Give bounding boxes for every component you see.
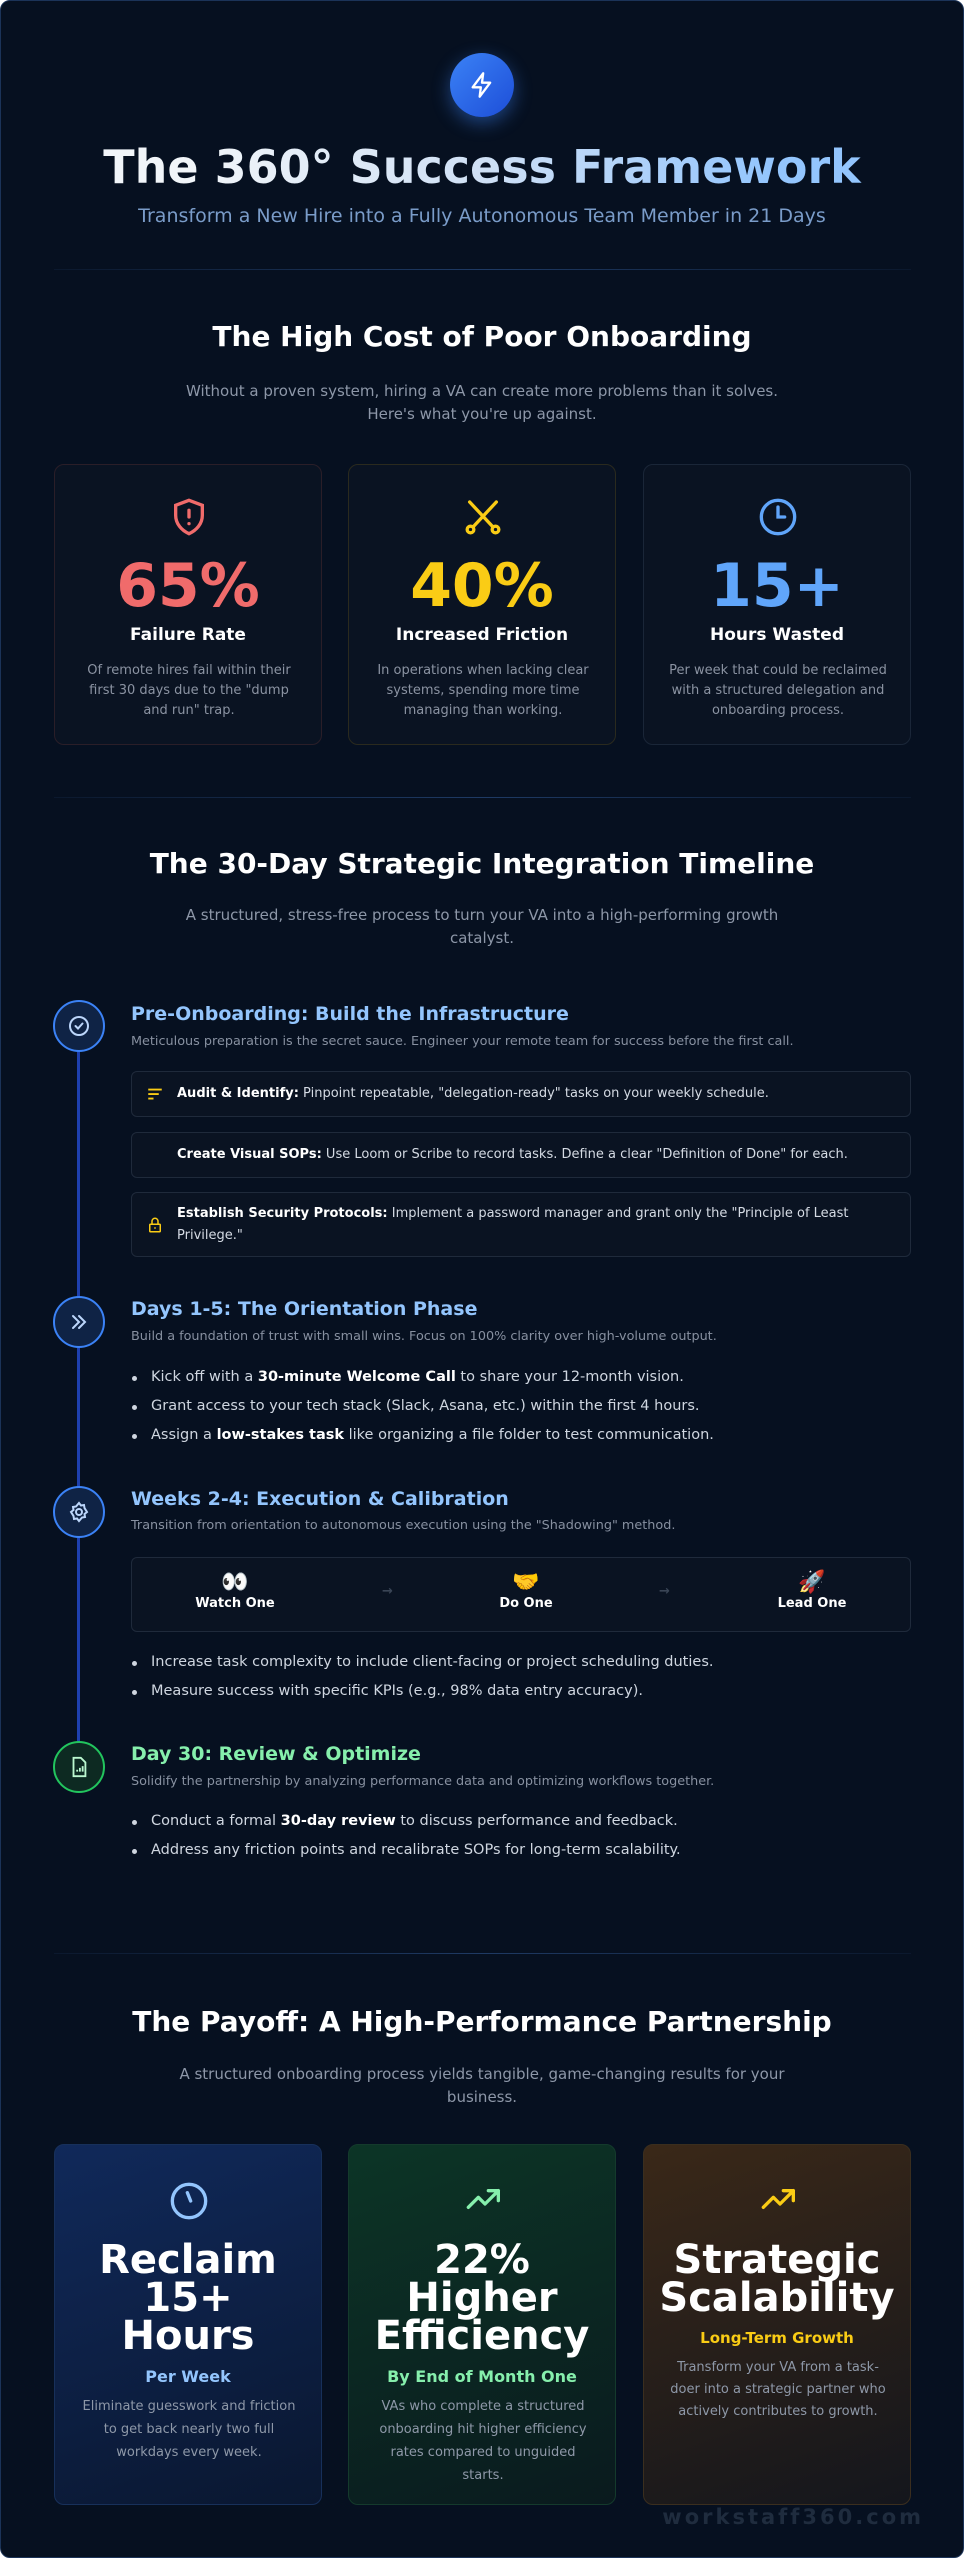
list: days 1-5: Grant access to your tech stack (Slack, Asana, etc.) within the first 4 hours. — [151, 1398, 700, 1414]
step: do one: Do One — [499, 1596, 553, 1611]
panel: increased friction — [348, 464, 616, 745]
box: security — [131, 1192, 911, 1257]
list: day 30: Conduct a formal 30-day review to discuss performance and feedback. — [151, 1813, 678, 1829]
icon: trend up yellow — [762, 2188, 796, 2210]
panel: increased friction: In operations when lacking clear systems, spending more time managing than working. — [377, 663, 589, 718]
text: weeks 2-4 desc: Transition from orientation to autonomous execution using the "Shadowing" method. — [131, 1518, 675, 1533]
list: days 1-5: Assign a low-stakes task like organizing a file folder to test communication. — [151, 1427, 714, 1443]
step: watch one: 👀 — [221, 1570, 249, 1595]
step: watch one — [195, 1570, 275, 1611]
text: high cost intro: Without a proven system, hiring a VA can create more problems than it solves. Here's what you're up against. — [186, 382, 778, 423]
subtitle: Transform a New Hire into a Fully Autonomous Team Member in 21 Days — [138, 205, 826, 227]
panel: efficiency: VAs who complete a structured onboarding hit higher efficiency rates compared to unguided starts. — [379, 2399, 587, 2483]
panel: failure rate: 65% — [116, 551, 260, 621]
list: weeks 2-4: Measure success with specific KPIs (e.g., 98% data entry accuracy). — [151, 1683, 643, 1699]
panel: failure rate: Of remote hires fail within their first 30 days due to the "dump and run" trap. — [87, 663, 291, 718]
icon: trend up green — [466, 2188, 500, 2210]
step: lead one: Lead One — [778, 1596, 846, 1611]
step: lead one: 🚀 — [798, 1570, 826, 1595]
text: payoff intro: A structured onboarding process yields tangible, game-changing results for your business. — [179, 2065, 785, 2106]
list: day 30 — [132, 1813, 681, 1858]
panel: watch do lead — [131, 1557, 911, 1632]
arrow: → — [659, 1584, 670, 1599]
panel: reclaim hours — [54, 2144, 322, 2505]
list: weeks 2-4: Increase task complexity to include client-facing or project scheduling duties. — [151, 1654, 713, 1670]
icon: chevrons node — [53, 1296, 105, 1348]
panel: increased friction: Increased Friction — [396, 625, 568, 645]
panel: hours wasted — [643, 464, 911, 745]
panel: scalability: Transform your VA from a task-doer into a strategic partner who actively contributes to growth. — [670, 2360, 886, 2419]
heading: timeline: The 30-Day Strategic Integration Timeline — [150, 847, 814, 880]
arrow: → — [382, 1584, 393, 1599]
icon: lightning badge — [450, 53, 514, 117]
box: visual SOPs: Create Visual SOPs: Use Loom or Scribe to record tasks. Define a clear "Definition of Done" for each. — [177, 1147, 848, 1162]
watermark: workstaff360.com — [662, 2505, 924, 2529]
list: day 30: Address any friction points and recalibrate SOPs for long-term scalability. — [151, 1842, 681, 1858]
panel: scalability — [643, 2144, 911, 2505]
panel: reclaim hours: Hours — [122, 2313, 254, 2359]
icon: crossed tools — [466, 500, 500, 534]
step: lead one — [778, 1570, 846, 1611]
heading: weeks 2-4: Weeks 2-4: Execution & Calibration — [131, 1488, 509, 1510]
heading: pre-onboarding: Pre-Onboarding: Build the Infrastructure — [131, 1003, 569, 1025]
box: audit: Audit & Identify: Pinpoint repeatable, "delegation-ready" tasks on your weekly schedule. — [177, 1086, 769, 1101]
step: do one — [499, 1570, 553, 1611]
icon: shield — [174, 498, 204, 536]
text: days 1-5 desc: Build a foundation of trust with small wins. Focus on 100% clarity over high-volume output. — [131, 1329, 717, 1344]
icon: clock — [170, 2182, 208, 2220]
panel: hours wasted: Per week that could be reclaimed with a structured delegation and onboarding process. — [669, 663, 887, 718]
panel: efficiency: Higher — [406, 2275, 558, 2321]
box: visual SOPs — [131, 1132, 911, 1178]
panel: efficiency — [348, 2144, 616, 2505]
panel: reclaim hours: Eliminate guesswork and friction to get back nearly two full workdays every week. — [83, 2399, 295, 2460]
icon: report node — [53, 1741, 105, 1793]
box: security: Establish Security Protocols: Implement a password manager and grant only the "Principle of Least Privilege." — [177, 1206, 849, 1242]
panel: reclaim hours: 15+ — [143, 2275, 233, 2321]
panel: scalability: Long-Term Growth — [700, 2329, 854, 2347]
text: timeline intro: A structured, stress-free process to turn your VA into a high-performing growth catalyst. — [186, 906, 778, 947]
timeline line — [77, 1030, 80, 1767]
icon: gear node — [53, 1486, 105, 1538]
panel: efficiency: By End of Month One — [387, 2367, 577, 2386]
title: The 360° Success Framework — [103, 140, 861, 194]
icon: clock — [760, 498, 796, 536]
panel: hours wasted: 15+ — [710, 551, 844, 621]
text: day 30 desc: Solidify the partnership by analyzing performance data and optimizing workflows together. — [131, 1774, 714, 1789]
text: pre-onboarding desc: Meticulous preparation is the secret sauce. Engineer your remote team for success before the first call. — [131, 1034, 794, 1049]
heading: payoff: The Payoff: A High-Performance Partnership — [132, 2005, 832, 2038]
panel: failure rate — [54, 464, 322, 745]
panel: hours wasted: Hours Wasted — [710, 625, 844, 645]
step: watch one: Watch One — [195, 1596, 275, 1611]
icon: check node — [53, 1000, 105, 1052]
list: days 1-5: Kick off with a 30-minute Welcome Call to share your 12-month vision. — [151, 1369, 684, 1385]
list: weeks 2-4 — [132, 1654, 713, 1699]
heading: high cost: The High Cost of Poor Onboarding — [212, 320, 752, 353]
heading: day 30: Day 30: Review & Optimize — [131, 1743, 421, 1765]
list: days 1-5 — [132, 1369, 714, 1443]
panel: efficiency: Efficiency — [375, 2313, 589, 2359]
panel: scalability: Scalability — [659, 2275, 895, 2321]
heading: days 1-5: Days 1-5: The Orientation Phase — [131, 1298, 477, 1320]
panel: reclaim hours: Reclaim — [99, 2237, 277, 2283]
panel: efficiency: 22% — [434, 2237, 530, 2283]
panel: increased friction: 40% — [410, 551, 554, 621]
panel: scalability: Strategic — [674, 2237, 880, 2283]
panel: failure rate: Failure Rate — [130, 625, 246, 645]
box: audit — [131, 1071, 911, 1117]
panel: reclaim hours: Per Week — [145, 2367, 231, 2386]
step: do one: 🤝 — [512, 1570, 540, 1595]
